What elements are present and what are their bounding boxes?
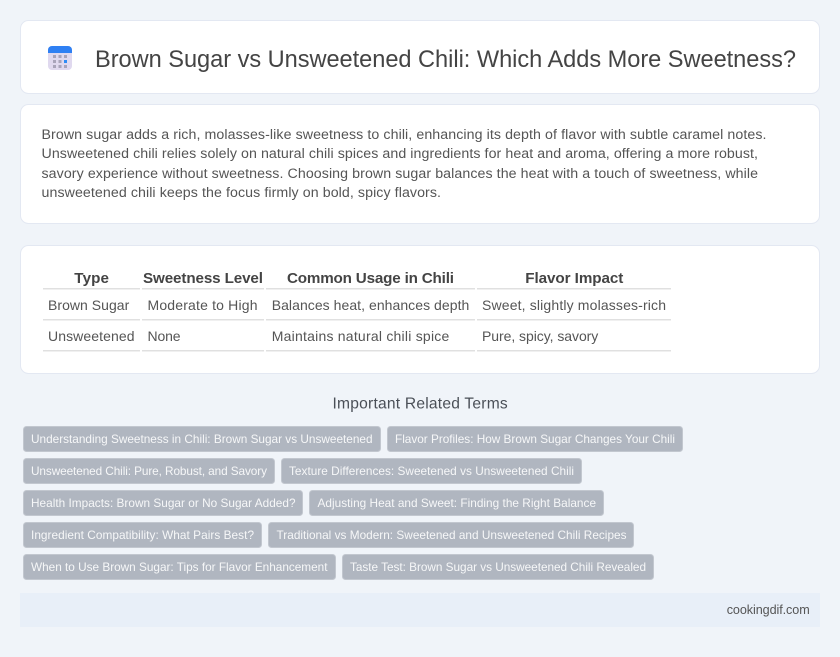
tags row 5	[24, 554, 654, 580]
table row: brown sugar: Balances heat, enhances depth	[272, 297, 469, 313]
tags row 4: Traditional vs Modern: Sweetened and Unsweetened Chili Recipes	[276, 528, 627, 542]
table row: unsweetened: Pure, spicy, savory	[482, 328, 598, 344]
tags row 2: Unsweetened Chili: Pure, Robust, and Savory	[31, 464, 267, 478]
tags row 3: Health Impacts: Brown Sugar or No Sugar Added?	[31, 496, 296, 510]
intro text panel	[20, 104, 820, 224]
tags row 4: Ingredient Compatibility: What Pairs Best?	[31, 528, 254, 542]
table header row: Type	[74, 270, 109, 287]
intro paragraph: unsweetened chili keeps the focus firmly on bold, spicy flavors.	[42, 185, 441, 201]
intro paragraph	[42, 127, 766, 201]
table row: brown sugar	[43, 297, 671, 320]
tags row 4	[24, 522, 634, 548]
tags row 2	[24, 458, 582, 484]
table header row: Sweetness Level	[143, 270, 263, 287]
table row: brown sugar: Sweet, slightly molasses-rich	[482, 297, 666, 313]
intro paragraph: savory experience without sweetness. Choosing brown sugar balances the heat with a touch of sweetness, while	[42, 166, 758, 182]
related terms section	[24, 396, 682, 580]
comparison table panel	[20, 246, 820, 374]
tags row 3	[24, 490, 604, 516]
tags row 5: When to Use Brown Sugar: Tips for Flavor Enhancement	[31, 560, 328, 574]
tags row 2: Texture Differences: Sweetened vs Unsweetened Chili	[289, 464, 574, 478]
tags row 1: Flavor Profiles: How Brown Sugar Changes Your Chili	[395, 432, 675, 446]
tags row 5: Taste Test: Brown Sugar vs Unsweetened Chili Revealed	[350, 560, 646, 574]
table row: unsweetened: Unsweetened	[48, 328, 134, 344]
tags row 3: Adjusting Heat and Sweet: Finding the Right Balance	[318, 496, 596, 510]
table row: brown sugar: Brown Sugar	[48, 297, 130, 313]
table header row: Common Usage in Chili	[287, 270, 454, 287]
section heading: Important Related Terms	[332, 396, 508, 412]
intro paragraph: Unsweetened chili relies solely on natural chili spices and ingredients for heat and aroma, offering a more robust,	[42, 146, 758, 162]
title: Brown Sugar vs Unsweetened Chili: Which Adds More Sweetness?	[95, 47, 796, 73]
footer source: cookingdif.com	[727, 603, 810, 617]
table row: unsweetened: None	[148, 328, 181, 344]
table row: unsweetened: Maintains natural chili spice	[272, 328, 450, 344]
table row: unsweetened	[43, 328, 671, 352]
header panel	[20, 20, 820, 94]
tags row 1: Understanding Sweetness in Chili: Brown Sugar vs Unsweetened	[31, 432, 372, 446]
table row: brown sugar: Moderate to High	[148, 297, 258, 313]
intro paragraph: Brown sugar adds a rich, molasses-like sweetness to chili, enhancing its depth of flavor with subtle caramel notes.	[42, 127, 766, 143]
tags row 1	[24, 426, 682, 452]
table header row: Flavor Impact	[525, 270, 623, 287]
footer bar	[20, 593, 820, 627]
table header row	[43, 270, 671, 290]
icon: calendar	[48, 46, 72, 70]
